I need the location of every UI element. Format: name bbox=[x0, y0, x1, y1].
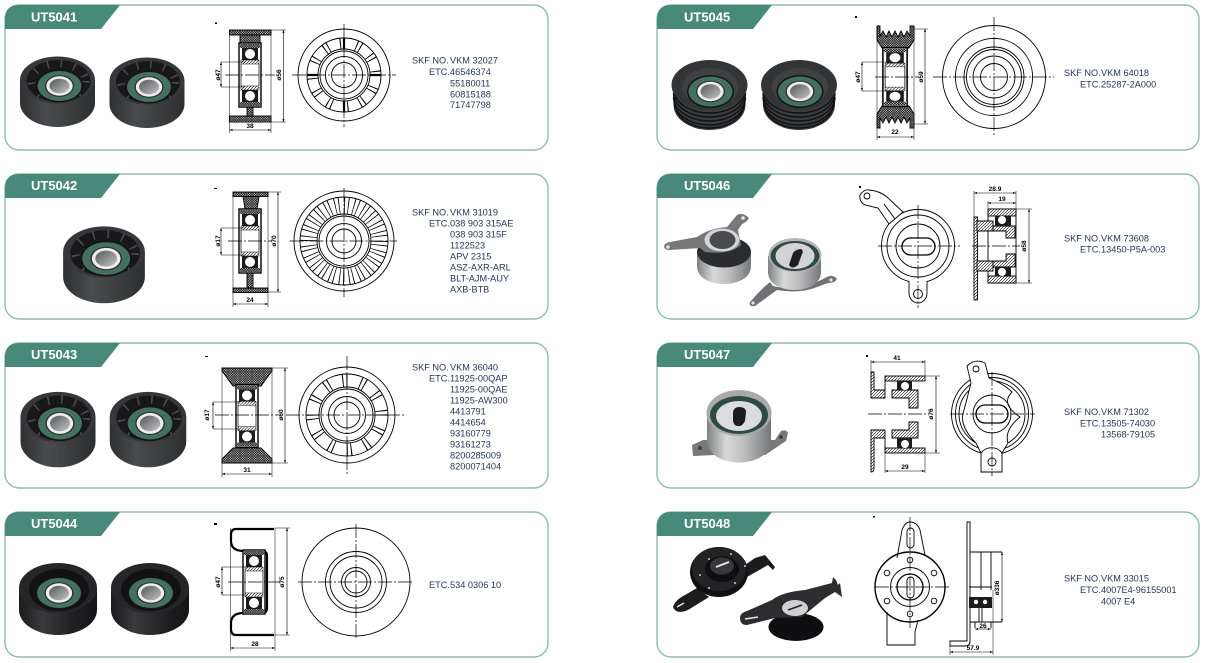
side drawing: 26 bbox=[979, 623, 987, 630]
part numbers: 11925-00QAE bbox=[450, 384, 508, 394]
panel frame bbox=[5, 512, 548, 657]
panel: UT5048 bbox=[657, 512, 1199, 657]
section drawing: 24 bbox=[246, 297, 254, 304]
part numbers: 71747798 bbox=[450, 100, 491, 110]
heading tab: UT5048: UT5048 bbox=[684, 516, 730, 531]
section drawing bbox=[204, 356, 288, 477]
part numbers: 93160779 bbox=[450, 428, 491, 438]
photo: two black tensioners with arms bbox=[673, 547, 842, 641]
front view drawing bbox=[298, 524, 414, 639]
part numbers bbox=[1064, 407, 1155, 440]
part numbers: APV 2315 bbox=[450, 252, 491, 262]
heading tab: UT5042: UT5042 bbox=[31, 178, 77, 193]
part numbers: VKM 64018 bbox=[1101, 68, 1149, 78]
panel: UT5041 bbox=[5, 5, 548, 150]
section drawing: ø56 bbox=[276, 69, 283, 81]
part numbers: ETC. bbox=[429, 67, 450, 77]
heading tab: UT5043 bbox=[5, 343, 120, 367]
part numbers: 13505-74030 bbox=[1101, 418, 1155, 428]
section drawing: 28.9 bbox=[989, 186, 1002, 193]
part numbers: ETC. bbox=[429, 374, 450, 384]
heading tab: UT5046: UT5046 bbox=[684, 178, 730, 193]
part numbers bbox=[412, 208, 513, 294]
section drawing bbox=[215, 22, 286, 133]
heading tab: UT5043: UT5043 bbox=[31, 347, 77, 362]
section drawing: ø75 bbox=[279, 576, 286, 588]
heading tab: UT5047: UT5047 bbox=[684, 347, 730, 362]
section drawing: ø47 bbox=[215, 576, 222, 588]
part numbers: 4414654 bbox=[450, 418, 486, 428]
heading tab: UT5045 bbox=[657, 5, 772, 29]
front view drawing bbox=[950, 361, 1035, 476]
side drawing bbox=[950, 522, 1002, 655]
part numbers: 038 903 315F bbox=[450, 230, 507, 240]
front view drawing bbox=[860, 190, 960, 308]
section drawing: ø60 bbox=[278, 409, 285, 421]
section drawing: ø17 bbox=[204, 409, 211, 421]
photo: two silver tensioners bbox=[664, 214, 837, 306]
part numbers: VKM 73608 bbox=[1101, 234, 1149, 244]
part numbers: 60815188 bbox=[450, 90, 491, 100]
part numbers: VKM 36040 bbox=[450, 362, 498, 372]
part numbers: 55180011 bbox=[450, 78, 490, 88]
part numbers: 8200285009 bbox=[450, 450, 501, 460]
heading tab: UT5041: UT5041 bbox=[31, 10, 77, 24]
part numbers: ETC. bbox=[1080, 80, 1101, 90]
photo: two smooth black pulleys bbox=[19, 563, 189, 635]
part numbers: VKM 32027 bbox=[450, 56, 498, 66]
section drawing bbox=[214, 188, 281, 307]
panel: UT5044 bbox=[5, 512, 548, 657]
photo: silver tensioner bbox=[692, 390, 788, 462]
part numbers: SKF NO. bbox=[412, 208, 449, 218]
part numbers: SKF NO. bbox=[1064, 407, 1101, 417]
part numbers bbox=[1064, 68, 1156, 90]
section drawing: 22 bbox=[891, 129, 899, 136]
panel: UT5046 bbox=[657, 174, 1199, 319]
part numbers: 13450-P5A-003 bbox=[1101, 244, 1165, 254]
section drawing: ø47 bbox=[855, 71, 862, 83]
part numbers: SKF NO. bbox=[412, 362, 449, 372]
section drawing bbox=[855, 16, 928, 140]
part numbers: ETC. bbox=[1080, 418, 1101, 428]
heading tab: UT5044: UT5044 bbox=[31, 516, 78, 531]
section drawing: 41 bbox=[893, 355, 901, 362]
panel: UT5042 bbox=[5, 174, 548, 319]
panel: UT5047 bbox=[657, 343, 1199, 488]
part numbers: 534 0306 10 bbox=[450, 580, 501, 590]
side drawing: 57.9 bbox=[967, 645, 980, 652]
part numbers: ASZ-AXR-ARL bbox=[450, 262, 511, 272]
section drawing: ø17 bbox=[215, 235, 222, 247]
section drawing bbox=[859, 186, 1032, 300]
part numbers bbox=[412, 56, 498, 110]
section drawing: ø70 bbox=[271, 235, 278, 247]
part numbers: ETC. bbox=[429, 218, 450, 228]
photo: single ribbed pulley bbox=[63, 226, 145, 303]
heading tab: UT5047 bbox=[657, 343, 772, 367]
front view drawing bbox=[292, 24, 396, 127]
part numbers: ETC. bbox=[1080, 585, 1101, 595]
photo: two ribbed pulleys bbox=[20, 56, 184, 128]
panel frame bbox=[657, 174, 1199, 319]
heading tab: UT5041 bbox=[5, 5, 120, 29]
part numbers: 46546374 bbox=[450, 67, 491, 77]
part numbers: VKM 33015 bbox=[1101, 574, 1149, 584]
panel frame bbox=[5, 5, 548, 150]
section drawing: ø59 bbox=[918, 71, 925, 83]
photo: two grooved pulleys bbox=[672, 60, 837, 130]
section drawing: ø47 bbox=[215, 69, 222, 81]
part numbers: SKF NO. bbox=[1064, 234, 1101, 244]
part numbers: 11925-00QAP bbox=[450, 374, 508, 384]
part numbers: SKF NO. bbox=[1064, 574, 1101, 584]
panel: UT5043 bbox=[5, 343, 548, 488]
panel frame bbox=[5, 174, 548, 319]
part numbers: 4007 E4 bbox=[1101, 596, 1135, 606]
section drawing bbox=[214, 523, 290, 651]
heading tab: UT5042 bbox=[5, 174, 120, 198]
part numbers: 11925-AW300 bbox=[450, 396, 508, 406]
section drawing bbox=[866, 355, 940, 473]
side drawing: ø336 bbox=[994, 580, 1001, 595]
part numbers: VKM 71302 bbox=[1101, 407, 1149, 417]
panel frame bbox=[5, 343, 548, 488]
front view drawing bbox=[873, 516, 951, 645]
part numbers: ETC. bbox=[1080, 244, 1101, 254]
part numbers bbox=[412, 362, 508, 472]
panel frame bbox=[657, 5, 1199, 150]
panel: UT5045 bbox=[657, 5, 1199, 150]
front view drawing bbox=[933, 17, 1054, 137]
part numbers: 038 903 315AE bbox=[450, 218, 513, 228]
part numbers: SKF NO. bbox=[1064, 68, 1101, 78]
part numbers: 4413791 bbox=[450, 406, 486, 416]
photo: two tall ribbed pulleys bbox=[20, 392, 186, 467]
part numbers: 1122523 bbox=[450, 240, 485, 250]
part numbers bbox=[1064, 574, 1177, 606]
heading tab: UT5046 bbox=[657, 174, 772, 198]
heading tab: UT5044 bbox=[5, 512, 120, 536]
section drawing: ø58 bbox=[1021, 240, 1028, 252]
front view drawing bbox=[286, 356, 406, 475]
panel frame bbox=[657, 343, 1199, 488]
part numbers: 13568-79105 bbox=[1101, 430, 1155, 440]
section drawing: 31 bbox=[243, 467, 251, 474]
section drawing: 19 bbox=[998, 196, 1006, 203]
section drawing: 38 bbox=[246, 123, 254, 130]
part numbers: VKM 31019 bbox=[450, 208, 498, 218]
part numbers: ETC. bbox=[429, 580, 450, 590]
section drawing: 29 bbox=[901, 464, 909, 471]
part numbers bbox=[1064, 234, 1165, 254]
part numbers: 25287-2A000 bbox=[1101, 80, 1156, 90]
heading tab: UT5045: UT5045 bbox=[684, 10, 730, 24]
section drawing: 28 bbox=[251, 641, 259, 648]
part numbers: BLT-AJM-AUY bbox=[450, 274, 509, 284]
part numbers: SKF NO. bbox=[412, 56, 449, 66]
section drawing: ø76 bbox=[928, 408, 935, 420]
part numbers: 93161273 bbox=[450, 440, 491, 450]
part numbers: 4007E4-96155001 bbox=[1101, 585, 1177, 595]
front view drawing bbox=[290, 188, 397, 297]
part numbers: 8200071404 bbox=[450, 462, 501, 472]
heading tab: UT5048 bbox=[657, 512, 772, 536]
panel frame bbox=[657, 512, 1199, 657]
part numbers: AXB-BTB bbox=[450, 284, 489, 294]
